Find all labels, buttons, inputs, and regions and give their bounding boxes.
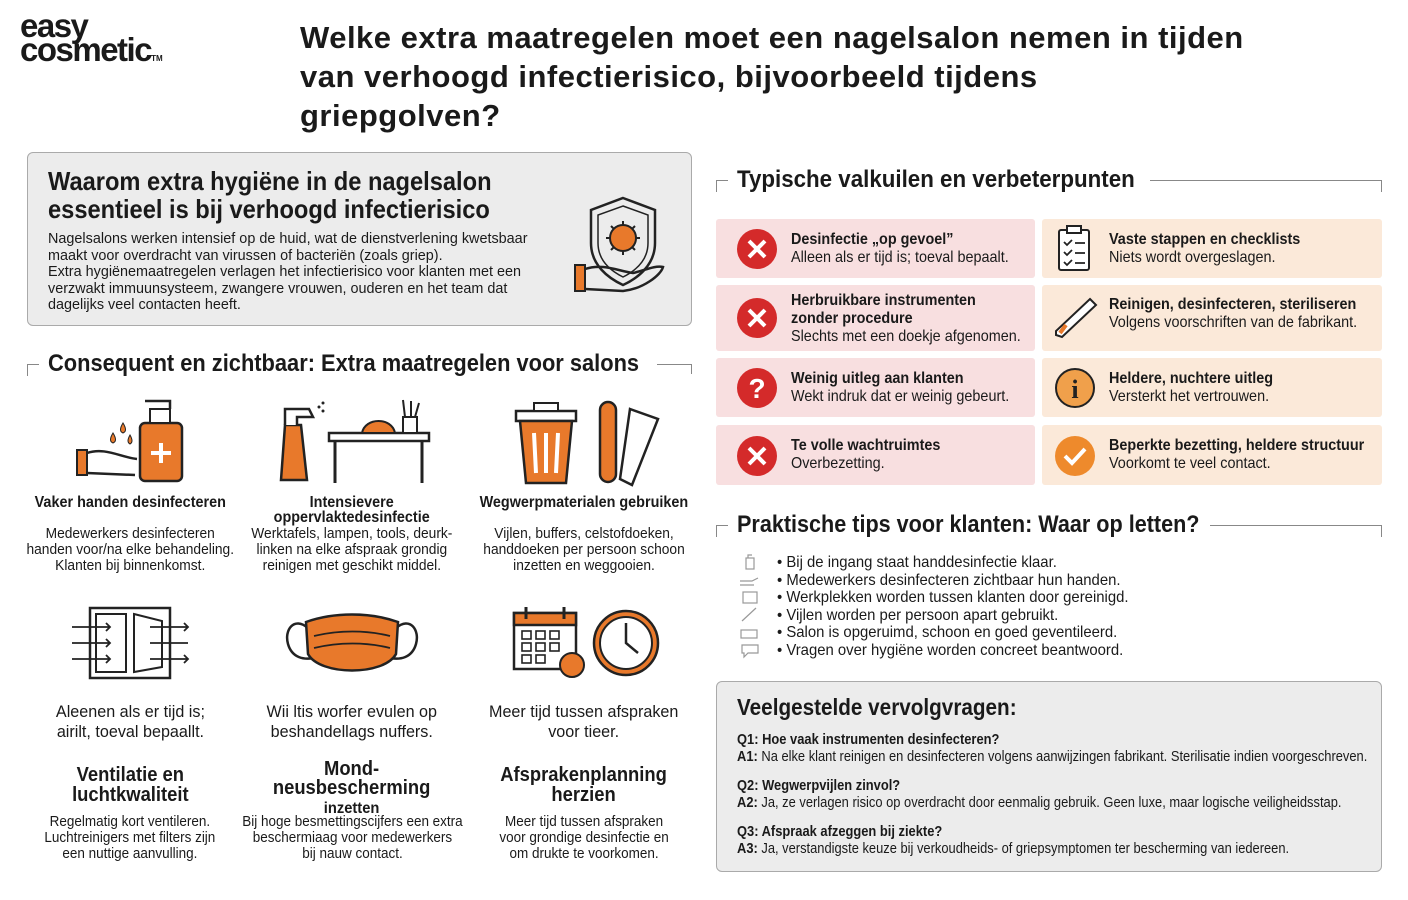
qa 2: A2: Ja, ze verlagen risico op overdracht door eenmalig gebruik. Geen luxe, maar logische veiligheidsstap. [737, 794, 1341, 811]
icon: question [737, 368, 777, 408]
text: Luchtreinigers met filters zijn [45, 830, 215, 846]
tips list [738, 554, 1158, 659]
text: Werktafels, lampen, tools, deurk- [251, 526, 453, 542]
text: voor grondige desinfectie en [499, 830, 669, 846]
improvement 3 [1042, 358, 1382, 417]
pitfall 2: Herbruikbare instrumenten [791, 292, 976, 309]
tips list: • Vijlen worden per persoon apart gebruikt. [777, 606, 1058, 624]
text: handdoeken per persoon schoon [483, 542, 685, 558]
measure 2: surfaces [251, 400, 453, 574]
text: beschermiaag voor medewerkers [252, 830, 452, 846]
title: oppervlaktedesinfectie [274, 509, 430, 526]
panel: why extra hygiene [27, 152, 692, 326]
text: Vijlen, buffers, celstofdoeken, [494, 526, 674, 542]
improvement 4 [1042, 425, 1382, 485]
logo [20, 7, 163, 68]
title [300, 20, 1244, 133]
icon: shield hand virus [574, 196, 664, 292]
pitfall 1: Desinfectie „op gevoel” [791, 231, 953, 248]
measure 4: ventilation [45, 606, 215, 862]
icon: orange check [1054, 435, 1096, 477]
qa 3 [737, 823, 1379, 857]
qa 1 [737, 731, 1408, 765]
icon: window airflow [72, 606, 190, 680]
title: luchtkwaliteit [72, 784, 188, 806]
text: Meer tijd tussen afspraken [505, 814, 663, 830]
section heading: tips [716, 511, 1382, 541]
text [26, 526, 234, 574]
tips list: • Salon is opgeruimd, schoon en goed geventileerd. [777, 624, 1117, 641]
icon: red x [737, 229, 777, 269]
text block: dagelijks veel contacten heeft. [48, 296, 241, 313]
title: Intensievere [310, 494, 394, 511]
qa 3: A3: Ja, verstandigste keuze bij verkoudheids- of griepsymptomen ter bescherming van iedereen. [737, 840, 1289, 857]
text: Regelmatig kort ventileren. [50, 814, 210, 830]
panel: FAQ [716, 681, 1382, 872]
title [72, 764, 188, 806]
pitfall 2: zonder procedure [791, 310, 913, 327]
improvement 1: Vaste stappen en checklists [1109, 231, 1300, 248]
title: griepgolven? [300, 98, 501, 133]
text: garbled [55, 702, 205, 741]
icon: hand sanitizer [76, 400, 184, 482]
text: bij nauw contact. [302, 846, 402, 862]
qa 1: Q1: Hoe vaak instrumenten desinfecteren? [737, 731, 999, 748]
improvement 2 [1042, 285, 1382, 351]
icon: red x [737, 298, 777, 338]
title: Welke extra maatregelen moet een nagelsalon nemen in tijden [300, 20, 1244, 55]
text: Medewerkers desinfecteren [45, 526, 215, 542]
text: garbled: Wii ltis worfer evulen op [267, 702, 437, 721]
icon: red x [736, 435, 778, 477]
text: handen voor/na elke behandeling. [26, 542, 234, 558]
icon: nail file [1055, 298, 1098, 338]
text: garbled: beshandellags nuffers. [271, 722, 433, 741]
icon: info: i [1071, 375, 1079, 404]
icon: checklist [1058, 225, 1090, 271]
icon: info [1055, 368, 1095, 408]
tips list: • Medewerkers desinfecteren zichtbaar hun handen. [777, 572, 1121, 588]
pitfall 1: Alleen als er tijd is; toeval bepaalt. [791, 249, 1009, 266]
pitfall 4: Te volle wachtruimtes [791, 437, 940, 454]
text block [48, 230, 528, 313]
pitfall 2 [716, 285, 1035, 351]
improvement 2: Reinigen, desinfecteren, steriliseren [1109, 296, 1356, 313]
title: neusbescherming [273, 777, 431, 799]
text: een nuttige aanvulling. [63, 846, 197, 862]
qa 2: Q2: Wegwerpvijlen zinvol? [737, 777, 900, 794]
heading: Veelgestelde vervolgvragen: [737, 694, 1017, 720]
qa 3: Q3: Afspraak afzeggen bij ziekte? [737, 823, 942, 840]
tips list: • Vragen over hygiëne worden concreet beantwoord. [777, 642, 1123, 658]
pitfall 3: Weinig uitleg aan klanten [791, 370, 964, 387]
text block: verzwakt immuunsysteem, zwangere vrouwen, ouderen en het team dat [48, 280, 507, 296]
title: Mond- [324, 758, 380, 780]
measure 6: scheduling [489, 607, 679, 862]
pitfall 4 [716, 425, 1035, 485]
section heading: measures: Consequent en zichtbaar: Extra maatregelen voor salons [48, 350, 639, 377]
section heading: pitfalls: Typische valkuilen en verbeterpunten [737, 166, 1135, 193]
improvement 3: Versterkt het vertrouwen. [1109, 388, 1269, 405]
title [273, 758, 431, 817]
text: linken na elke afspraak grondig [257, 542, 447, 558]
text [499, 814, 669, 862]
icon: face mask [286, 613, 418, 672]
icon: calendar and clock [512, 607, 660, 678]
logo: easy [20, 7, 87, 44]
title: inzetten [324, 800, 380, 817]
pitfall 1 [716, 219, 1035, 278]
improvement 1: Niets wordt overgeslagen. [1109, 249, 1275, 266]
section heading: pitfalls [716, 166, 1382, 193]
text: om drukte te voorkomen. [509, 846, 659, 862]
measure 5: mask [242, 613, 463, 862]
qa 2 [737, 777, 1408, 811]
heading: Waarom extra hygiëne in de nagelsalon [48, 166, 492, 196]
text: Klanten bij binnenkomst. [55, 558, 205, 574]
improvement 2: Volgens voorschriften van de fabrikant. [1109, 314, 1357, 331]
heading: essentieel is bij verhoogd infectierisico [48, 194, 490, 224]
measure 1: hands [26, 400, 234, 574]
title [500, 764, 667, 806]
logo: cosmeticTM [20, 31, 163, 68]
text: reinigen met geschikt middel. [263, 558, 441, 574]
text: garbled [266, 702, 437, 741]
icon: question: ? [748, 373, 766, 404]
icon: spray and table [280, 400, 430, 483]
pitfall 4: Overbezetting. [791, 455, 885, 472]
text [251, 526, 453, 574]
text: Bij hoge besmettingscijfers een extra [242, 814, 462, 830]
pitfall 3: Wekt indruk dat er weinig gebeurt. [791, 388, 1009, 405]
text: inzetten en weggooien. [513, 558, 655, 574]
text [242, 814, 463, 862]
text: garbled: voor tieer. [549, 722, 619, 741]
qa 1: A1: Na elke klant reinigen en desinfecteren volgens aanwijzingen fabrikant. Sterilisatie indien voorgeschreven. [737, 748, 1367, 765]
text block: maakt voor overdracht van virussen of bacteriën (zoals griep). [48, 246, 443, 264]
title: Wegwerpmaterialen gebruiken [480, 494, 688, 511]
icon: bin and file [514, 400, 660, 487]
heading [48, 166, 492, 224]
text: garbled: Aleenen als er tijd is; [55, 702, 205, 721]
text [483, 526, 685, 574]
improvement 4: Voorkomt te veel contact. [1109, 455, 1271, 472]
title: herzien [552, 784, 616, 806]
improvement 1 [1042, 219, 1382, 278]
tips list: • Bij de ingang staat handdesinfectie klaar. [777, 554, 1057, 571]
text: garbled: airilt, toeval bepaallt. [56, 722, 204, 741]
pitfall 3 [716, 358, 1035, 417]
tips list: • Werkplekken worden tussen klanten door gereinigd. [777, 589, 1129, 606]
title: Vaker handen desinfecteren [34, 494, 226, 511]
text [45, 814, 215, 862]
improvement 3: Heldere, nuchtere uitleg [1109, 370, 1273, 387]
title: Ventilatie en [76, 764, 184, 786]
section heading: tips: Praktische tips voor klanten: Waar op letten? [737, 511, 1200, 538]
measure 3: disposables [480, 400, 688, 574]
text block: Extra hygiënemaatregelen verlagen het infectierisico voor klanten met een [48, 263, 521, 280]
text: garbled: Meer tijd tussen afspraken [489, 702, 679, 721]
title [274, 494, 430, 526]
title: van verhoogd infectierisico, bijvoorbeeld tijdens [300, 59, 1038, 94]
text: garbled [489, 702, 679, 741]
title: Afsprakenplanning [501, 764, 667, 786]
improvement 4: Beperkte bezetting, heldere structuur [1109, 437, 1364, 454]
pitfall 2: Slechts met een doekje afgenomen. [791, 328, 1021, 345]
icons column [738, 554, 762, 659]
text block: Nagelsalons werken intensief op de huid, wat de dienstverlening kwetsbaar [48, 230, 527, 247]
